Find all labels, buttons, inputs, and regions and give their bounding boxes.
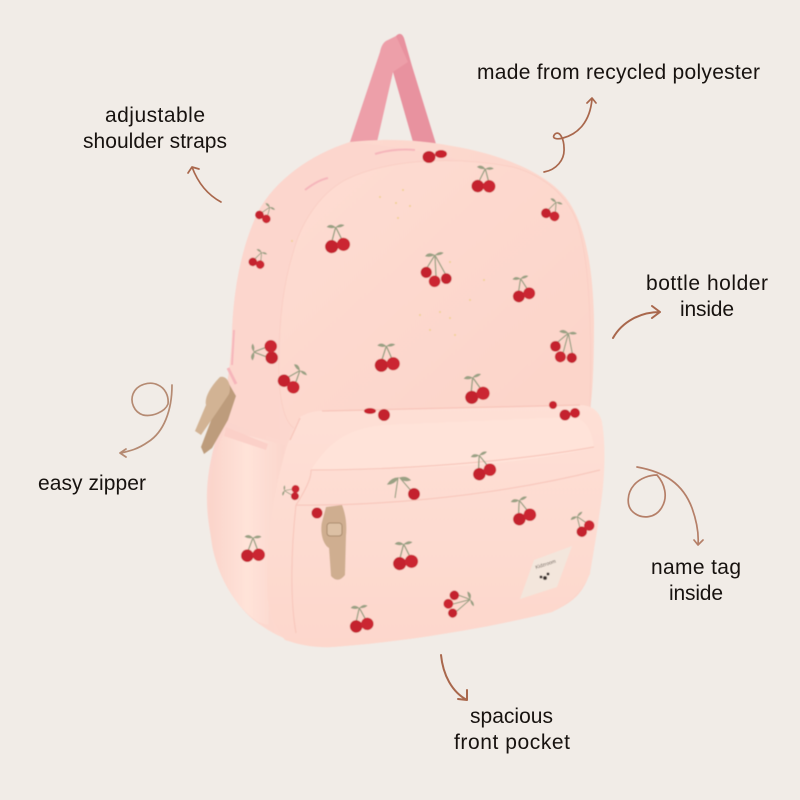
label: name tag inside: inside [669, 582, 723, 605]
front panel [279, 161, 591, 430]
label: bottle holder inside: bottle holder [646, 272, 768, 295]
arrow: name tag [628, 467, 703, 545]
label: spacious front pocket: spacious [470, 705, 553, 728]
label: easy zipper: easy zipper [38, 472, 146, 495]
cherry print on front pocket [281, 401, 597, 634]
side mesh pocket [209, 427, 298, 625]
label: bottle holder inside: inside [680, 298, 734, 321]
side gusset shading [222, 142, 460, 440]
arrow: shoulder straps [188, 167, 221, 202]
front pocket zipper pull [321, 505, 346, 580]
name label patch [520, 546, 572, 599]
cherry print on main body [247, 150, 581, 405]
label: adjustable shoulder straps: shoulder straps [83, 130, 227, 153]
backpack illustration [195, 34, 604, 647]
label: name tag inside: name tag [651, 556, 741, 579]
label: adjustable shoulder straps: adjustable [105, 104, 205, 127]
yellow dots [291, 189, 556, 521]
label: name tag inside [651, 556, 741, 605]
label: bottle holder inside [646, 272, 768, 321]
zip tape on top of gusset [232, 150, 415, 365]
main backpack body [207, 140, 604, 647]
label: made from recycled polyester: made from recycled polyester [477, 61, 760, 84]
arrow: recycled polyester [544, 98, 596, 172]
arrow: bottle holder [613, 306, 660, 338]
label: adjustable shoulder straps [83, 104, 227, 153]
pocket seams [292, 447, 600, 633]
main zipper pulls [195, 368, 236, 454]
label: spacious front pocket [454, 705, 570, 754]
front pocket [267, 405, 604, 647]
label: spacious front pocket: front pocket [454, 731, 570, 754]
arrow: easy zipper [120, 383, 172, 457]
top carry handle [350, 34, 436, 144]
arrow: front pocket [441, 655, 467, 700]
name label patch: Kidzroom [535, 559, 557, 571]
